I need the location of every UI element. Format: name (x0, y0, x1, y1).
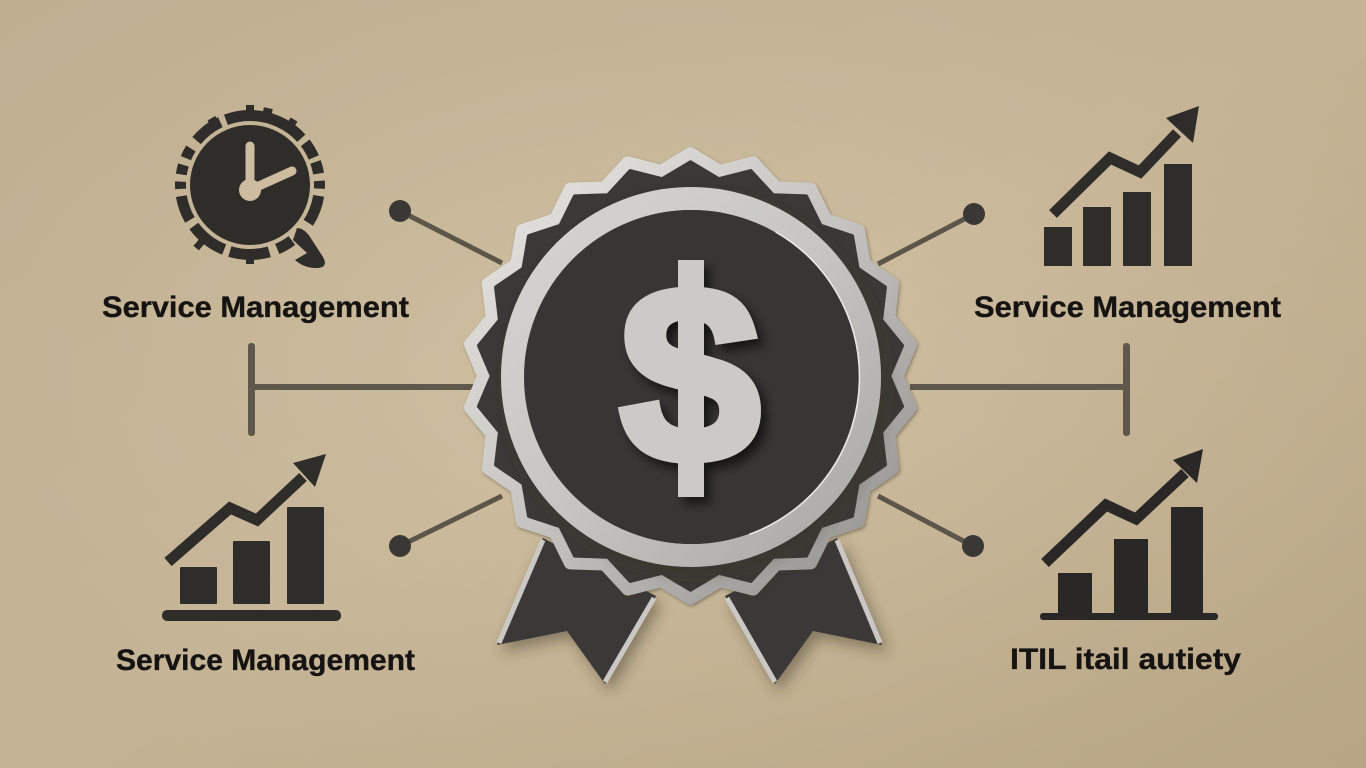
icon: bar chart with arrow, bottom left (162, 454, 341, 621)
silver ring (512, 198, 870, 556)
label: service management, top left: Service Management (102, 291, 409, 324)
connector: upper left (389, 200, 502, 263)
scalloped dark face (479, 162, 902, 590)
dollar sign: $ (620, 235, 760, 514)
ribbon: left tail (497, 538, 656, 684)
label: service management, top right: Service Management (974, 291, 1281, 324)
ribbon: right tail (725, 538, 882, 684)
icon: bar chart with arrow, bottom right (1040, 449, 1218, 620)
label: ITIL text, bottom right: ITIL itail autiety (1010, 643, 1241, 676)
scalloped silver edge (471, 154, 910, 598)
connector: upper right (878, 203, 985, 264)
icon: bar chart with arrow, top right (1044, 106, 1199, 266)
connector: middle right bracket (910, 343, 1130, 436)
inner dark disc (525, 210, 859, 544)
connector: lower right (878, 496, 984, 557)
badge (471, 154, 910, 684)
label: service management, bottom left: Service Management (116, 644, 415, 677)
connector: lower left (389, 496, 502, 557)
ring highlight (524, 210, 860, 544)
connector: middle left bracket (248, 343, 473, 436)
icon: clock in gear with magnifier handle (180, 105, 325, 268)
